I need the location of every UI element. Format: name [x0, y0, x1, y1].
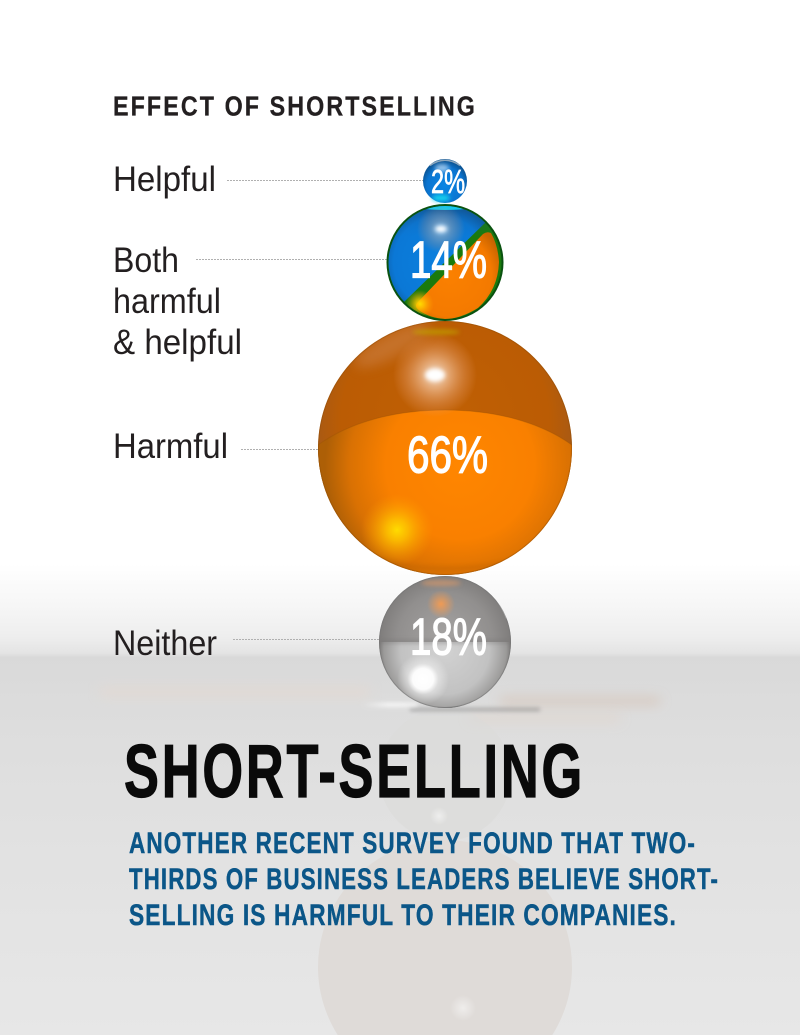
sphere: 66% harmful [318, 315, 572, 575]
sphere: 2% helpful [423, 159, 467, 203]
label: Both harmful & helpful: & helpful [113, 323, 242, 362]
sphere contact shadow [362, 703, 540, 711]
value: 66%: 66% [407, 426, 488, 484]
label: Both harmful & helpful: harmful [113, 282, 221, 321]
sphere: 14% both [380, 204, 504, 322]
label: Both harmful & helpful: Both [113, 241, 179, 280]
value: 14%: 14% [410, 232, 487, 290]
label: Both harmful & helpful [113, 241, 388, 362]
body text: survey finding [129, 827, 719, 932]
value: 18%: 18% [410, 608, 487, 666]
headline: short-selling: SHORT-SELLING [124, 729, 585, 813]
label: Neither: Neither [113, 624, 217, 663]
label: Harmful: Harmful [113, 427, 228, 466]
label: Helpful: Helpful [113, 160, 216, 199]
sphere: 18% neither [379, 576, 511, 709]
heading: effect of shortselling: EFFECT OF SHORTSELLING [113, 90, 477, 122]
value: 2%: 2% [431, 163, 465, 200]
floor reflection of spheres [100, 688, 660, 1035]
